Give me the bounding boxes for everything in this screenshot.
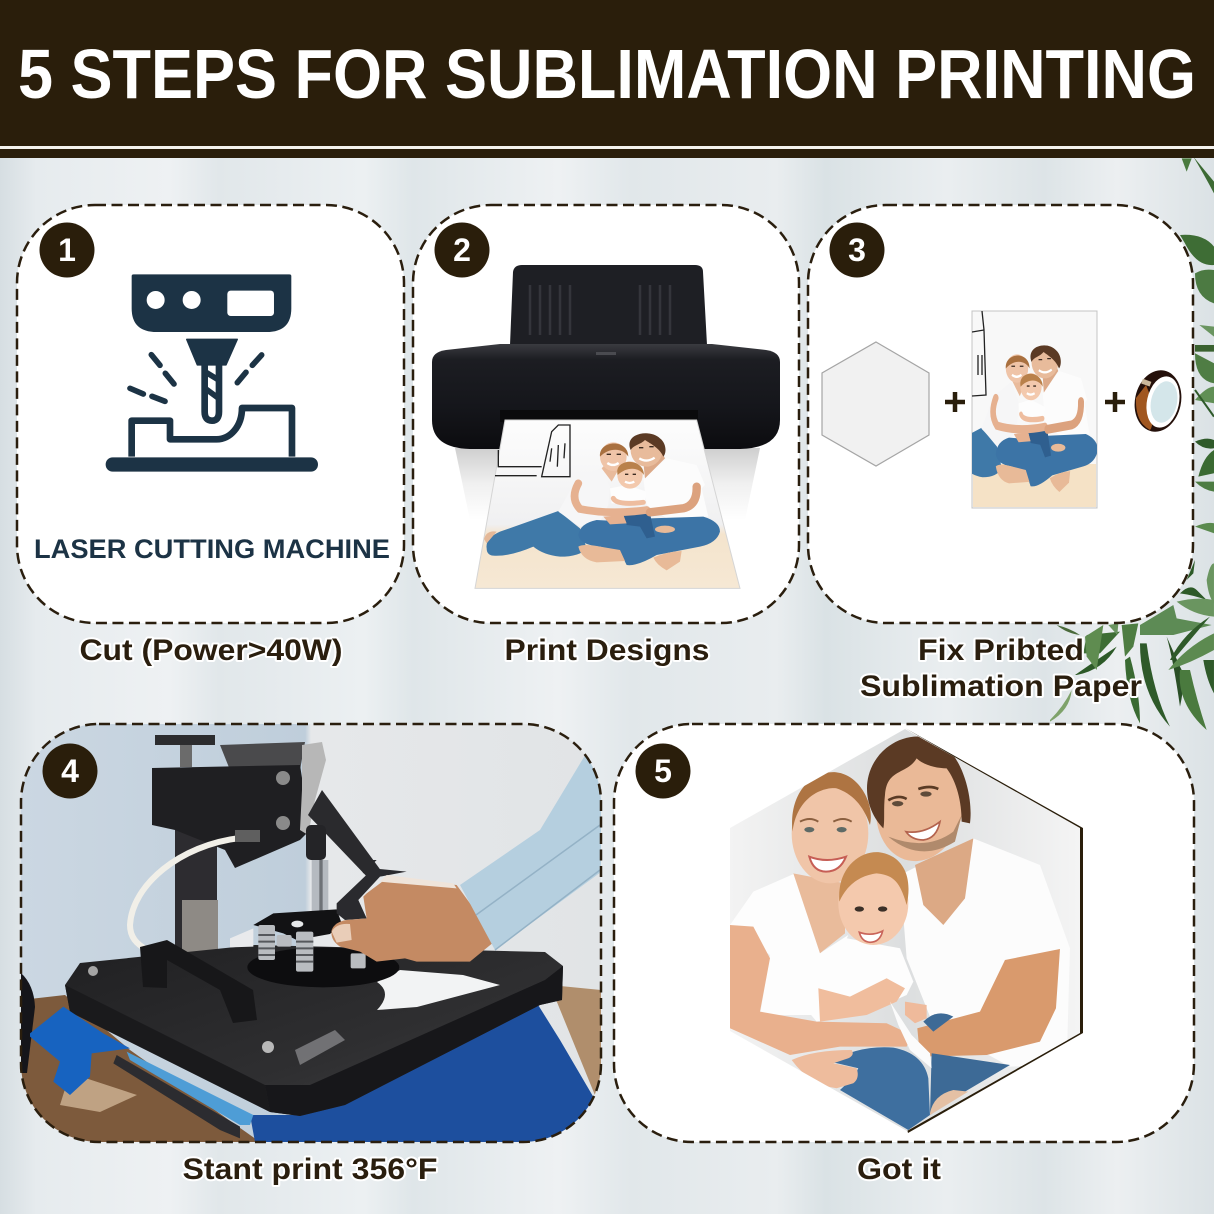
- child arm: [818, 978, 905, 1022]
- blank hexagon: [822, 342, 929, 466]
- caption 3: Sublimation Paper: [860, 670, 1142, 703]
- badge 5: [636, 744, 690, 798]
- panel: step 2 print: [413, 205, 799, 623]
- badge 1: 1: [58, 232, 76, 268]
- caption 1: Cut (Power>40W): [80, 634, 342, 667]
- caption 3: Fix Pribted: [918, 634, 1084, 667]
- press plate: [65, 945, 563, 1116]
- left blue shirt and platen: [30, 1007, 253, 1138]
- woman arm: [730, 925, 912, 1055]
- badge 1: [40, 222, 94, 278]
- hexagon family photo: [730, 729, 1080, 1131]
- hand: [331, 878, 498, 962]
- woman face: [792, 783, 868, 883]
- carry handle: [140, 940, 257, 1023]
- icon: heat tape roll: [1129, 366, 1187, 436]
- child shirt: [808, 938, 913, 1022]
- dark object left: [21, 973, 35, 1073]
- woman neck: [793, 873, 845, 953]
- panel: step 1 cut: [17, 205, 404, 623]
- printed paper: [475, 420, 740, 588]
- icon: laser cutting machine: [106, 274, 318, 472]
- badge 3: [830, 222, 884, 278]
- badge 3: 3: [848, 232, 866, 268]
- sublimation paper print: [972, 310, 1098, 508]
- blue shirt: [250, 1000, 601, 1142]
- hexagon edge: [905, 728, 1083, 1133]
- badge 4: [42, 744, 98, 798]
- panel: step 5 finished photo: [614, 724, 1194, 1142]
- caption 4: Stant print 356°F: [182, 1153, 438, 1186]
- child face: [838, 873, 908, 945]
- man face: [876, 758, 962, 862]
- man arm: [917, 949, 1060, 1057]
- wood table: [21, 995, 260, 1142]
- badge 2: [434, 222, 490, 278]
- lower plant leaves: [1050, 560, 1214, 730]
- badge 2: 2: [453, 232, 471, 268]
- badge 5: 5: [654, 753, 672, 789]
- title banner: [0, 0, 1214, 158]
- hands: [792, 1050, 858, 1088]
- man neck: [915, 838, 973, 925]
- press column: [130, 735, 382, 955]
- caption 2: Print Designs: [504, 634, 710, 667]
- icon label: LASER CUTTING MACHINE: [34, 534, 390, 564]
- panel: step 4 heat press photo: [21, 724, 601, 1142]
- upper plant leaves: [1180, 157, 1214, 533]
- caption 5: Got it: [857, 1153, 941, 1186]
- woman shirt: [730, 873, 848, 1015]
- plant on right side: [1050, 157, 1214, 730]
- pressure plate and springs: [230, 860, 498, 987]
- man shirt: [900, 838, 1070, 1067]
- plus sign: [945, 392, 965, 412]
- printer illustration: [432, 265, 780, 588]
- jeans: [923, 1013, 953, 1032]
- panel: step 3 fix: [808, 205, 1193, 623]
- plus sign: [1105, 392, 1125, 412]
- badge 4: 4: [61, 753, 79, 789]
- caption 3: [860, 634, 1142, 703]
- sleeve: [460, 752, 601, 950]
